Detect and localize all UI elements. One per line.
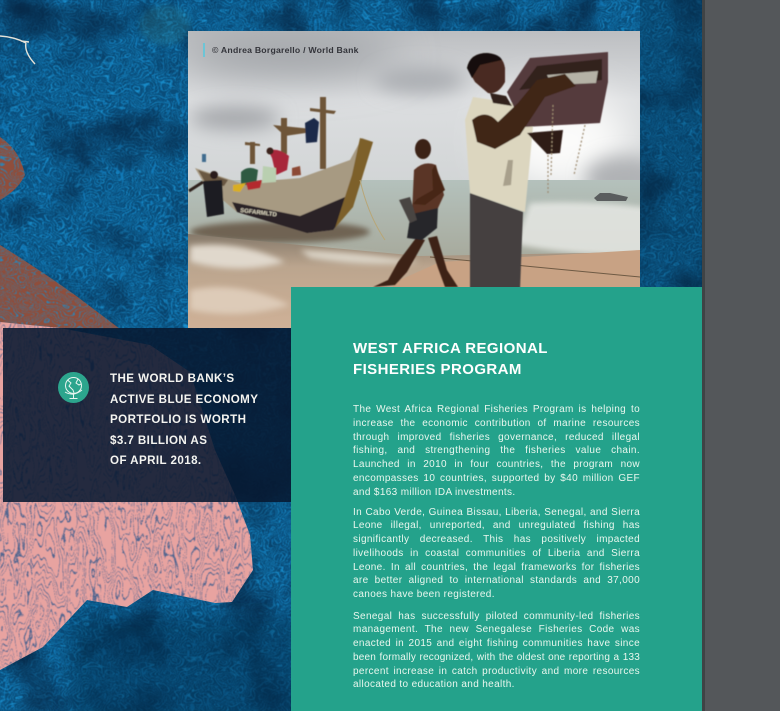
icon: globe — [58, 372, 89, 403]
callout text: OF APRIL 2018. — [110, 454, 202, 467]
paragraph 3: management. The new Senegalese Fisheries Code was — [353, 624, 640, 635]
paragraph 1: Launched in 2010 in four countries, the program now — [353, 459, 640, 470]
callout text — [110, 372, 258, 467]
photo backing — [188, 31, 640, 328]
photo: fishermen on the beach — [180, 31, 665, 328]
boat: SGFARMLTD — [240, 208, 278, 219]
heading: WEST AFRICA REGIONAL — [353, 340, 548, 357]
white rope — [0, 36, 35, 64]
crate — [507, 52, 608, 127]
heading — [353, 340, 548, 378]
photo credit: © Andrea Borgarello / World Bank — [212, 45, 359, 55]
paragraph 1: and $163 million IDA investments. — [353, 486, 516, 498]
teal tint top — [139, 5, 191, 45]
dark lower net — [70, 615, 302, 711]
arms under the net — [0, 137, 120, 329]
boat — [189, 97, 373, 233]
distant boat — [594, 193, 628, 201]
paragraph 3: allocated to education and health. — [353, 679, 515, 690]
paragraph 3: been formally recognized, with the oldest one reporting a 133 — [353, 652, 640, 663]
hull — [195, 138, 373, 233]
paragraph 2 — [353, 506, 640, 600]
sky — [188, 31, 640, 183]
paragraph 1 — [353, 404, 640, 498]
trousers — [470, 193, 523, 290]
callout text: $3.7 BILLION AS — [110, 434, 207, 446]
panel: blue economy callout — [3, 328, 291, 502]
paragraph 3: percent increase in catch productivity and more resources — [353, 666, 640, 676]
paragraph 2: Leone. In all countries, the legal frameworks for fisheries — [353, 562, 640, 572]
rear arm — [527, 130, 563, 154]
sea — [188, 180, 640, 256]
paragraph 2: livelihoods in coastal communities of Liberia and Sierra — [353, 548, 640, 559]
paragraph 1: increase the economic contribution of marine resources — [353, 418, 640, 429]
panel: program description — [291, 287, 702, 711]
paragraph 2: are better aligned to international standards and 37,000 — [353, 575, 640, 586]
shirt — [465, 97, 533, 212]
masts — [245, 97, 336, 169]
paragraph 1: fishing, and strengthening the fisheries value chain. — [353, 445, 640, 456]
paragraph 3: Senegal has successfully piloted community-led fisheries — [353, 610, 640, 622]
man carrying crate — [465, 52, 608, 290]
callout text: PORTFOLIO IS WORTH — [110, 413, 246, 426]
front arm — [472, 74, 576, 149]
people on boat — [268, 150, 289, 175]
boy walking — [373, 139, 458, 287]
paragraph 2: Leone illegal, unreported, and unregulated fishing has — [353, 520, 640, 531]
head — [467, 53, 505, 93]
water reflection by the boat — [190, 221, 370, 243]
paragraph 2: significantly decreased. This has positively impacted — [353, 534, 640, 545]
paragraph 2: canoes have been registered. — [353, 589, 495, 600]
page edge shadow — [702, 0, 705, 711]
callout text: ACTIVE BLUE ECONOMY — [110, 392, 258, 406]
paragraph 3 — [353, 610, 640, 690]
wet sand — [188, 234, 640, 328]
pink garment under net — [0, 320, 260, 680]
callout text: THE WORLD BANK’S — [110, 372, 235, 385]
paragraph 1: encompasses 10 countries, supported by $40 million GEF — [353, 473, 640, 484]
heading: FISHERIES PROGRAM — [353, 361, 522, 378]
paragraph 2: In Cabo Verde, Guinea Bissau, Liberia, Senegal, and Sierra — [353, 506, 640, 518]
paragraph 1: The West Africa Regional Fisheries Program is helping to — [353, 404, 640, 415]
dry sand — [393, 250, 640, 287]
paragraph 3: enacted in 2015 and eight fishing communities have since — [353, 638, 640, 649]
water drips — [548, 105, 585, 195]
darker right strip — [640, 0, 702, 290]
net over arms — [0, 138, 118, 329]
paragraph 1: through improved fisheries governance, reduced illegal — [353, 432, 640, 442]
